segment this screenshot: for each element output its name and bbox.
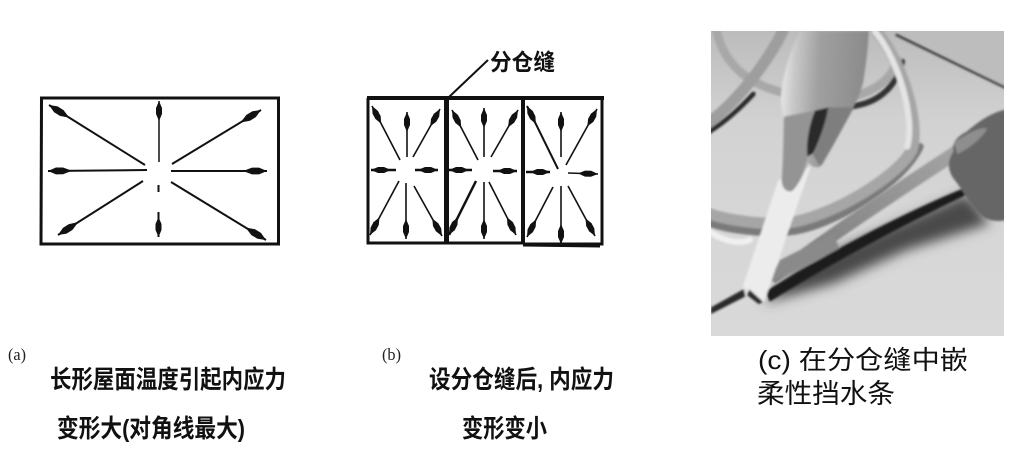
caption b line 1: 设分仓缝后, 内应力 xyxy=(429,365,614,394)
stress arrows cell 3 xyxy=(526,106,598,244)
right hand xyxy=(949,109,1007,221)
stress arrows cell 1 xyxy=(370,106,442,239)
caption b line 2: 变形变小 xyxy=(462,415,547,443)
caption c line 2: 柔性挡水条 xyxy=(757,379,895,409)
hose loop xyxy=(853,62,902,106)
fan shadow under strip xyxy=(770,240,840,282)
photo c: inserting flexible water-stop strip xyxy=(707,31,1007,336)
caption a line 2: 变形大(对角线最大) xyxy=(57,415,245,443)
diagonal hose xyxy=(707,94,753,133)
diagram b: roof with dividing joints xyxy=(367,49,604,246)
frame b xyxy=(367,97,604,246)
index finger shading xyxy=(782,111,815,191)
caption a xyxy=(8,345,286,443)
label: joint: 分仓缝 xyxy=(490,49,555,75)
right thumb highlight xyxy=(954,128,987,154)
stress arrows a xyxy=(48,101,267,240)
joint groove xyxy=(711,289,745,314)
stress arrows cell 2 xyxy=(449,108,518,239)
caption a line 1: 长形屋面温度引起内应力 xyxy=(50,365,286,394)
white insertion tool xyxy=(743,167,811,303)
middle finger shading xyxy=(813,107,854,167)
tag b: (b) xyxy=(382,345,401,364)
top right strip xyxy=(920,44,1004,86)
dark strip xyxy=(765,188,966,302)
photo background xyxy=(711,31,1004,336)
gap between fingers xyxy=(807,107,828,157)
caption b xyxy=(382,345,614,443)
caption c line 1: (c) 在分仓缝中嵌 xyxy=(758,345,968,375)
leader line to joint xyxy=(449,60,488,97)
floor shadow xyxy=(763,193,990,303)
caption c xyxy=(757,345,968,409)
left hand xyxy=(781,31,869,191)
long hose xyxy=(707,147,920,233)
diagram a: long roof internal stress xyxy=(41,98,278,244)
water-stop rubber strip xyxy=(768,146,960,283)
frame a xyxy=(41,98,278,244)
tag a: (a) xyxy=(8,345,26,364)
